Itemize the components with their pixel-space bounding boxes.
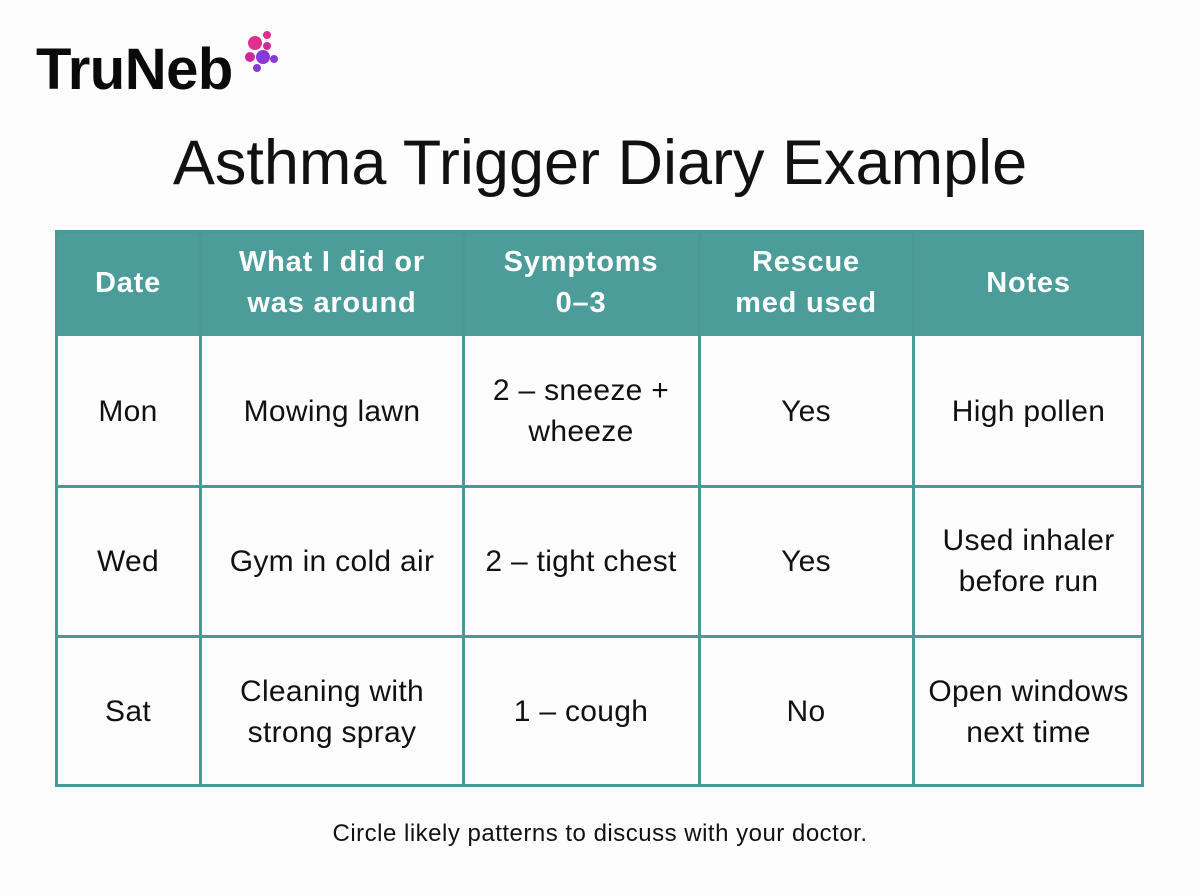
table: Sat bbox=[105, 695, 151, 728]
logo: TruNeb bbox=[36, 37, 233, 102]
table: was around bbox=[247, 287, 417, 319]
table: next time bbox=[966, 716, 1091, 748]
row: Sat bbox=[105, 674, 1129, 748]
row: Mon bbox=[98, 374, 1105, 448]
table: med used bbox=[735, 287, 877, 319]
table: wheeze bbox=[528, 415, 634, 448]
table: 2 – sneeze + bbox=[493, 374, 669, 407]
table: Mon bbox=[98, 394, 158, 428]
table: Symptoms bbox=[504, 246, 658, 278]
header row bbox=[95, 246, 1071, 319]
footer note: Circle likely patterns to discuss with your doctor. bbox=[332, 820, 868, 847]
table: No bbox=[787, 695, 825, 728]
table: What I did or bbox=[239, 246, 425, 278]
table: Cleaning with bbox=[240, 674, 424, 708]
title: Asthma Trigger Diary Example bbox=[173, 128, 1027, 198]
table: Open windows bbox=[928, 674, 1129, 708]
table: Gym in cold air bbox=[230, 544, 434, 578]
table: before run bbox=[959, 565, 1098, 598]
table: Wed bbox=[97, 544, 159, 578]
table: High pollen bbox=[952, 394, 1105, 428]
table: Mowing lawn bbox=[244, 394, 420, 428]
table: 0–3 bbox=[556, 287, 606, 319]
table: Rescue bbox=[752, 246, 860, 278]
table: 2 – tight chest bbox=[485, 544, 677, 578]
table: Notes bbox=[986, 266, 1071, 298]
row: Wed bbox=[97, 524, 1115, 598]
table: Date bbox=[95, 266, 161, 298]
table: Yes bbox=[781, 544, 831, 578]
table: 1 – cough bbox=[514, 695, 648, 728]
table: Yes bbox=[781, 394, 831, 428]
table: Used inhaler bbox=[942, 524, 1115, 557]
table: strong spray bbox=[248, 716, 416, 748]
